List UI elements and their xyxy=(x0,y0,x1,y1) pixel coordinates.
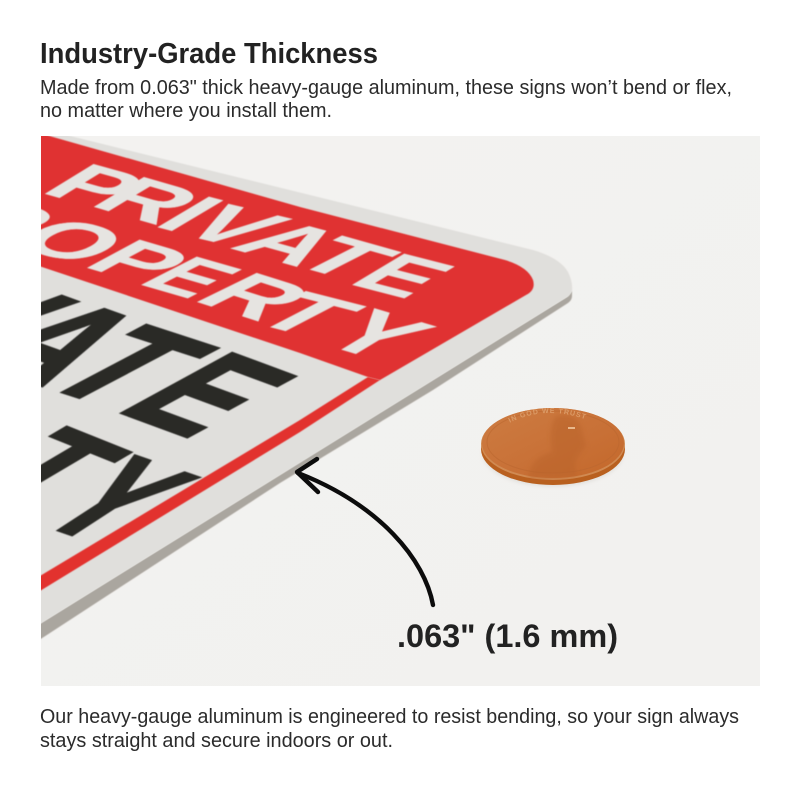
closing text: Our heavy-gauge aluminum is engineered to resist bending, so your sign always xyxy=(40,705,739,728)
penny coin: IN GOD WE TRUST xyxy=(508,408,586,422)
panel: product photo xyxy=(41,136,760,686)
header text: property: T xyxy=(229,282,385,346)
header text: private: V xyxy=(157,195,309,257)
black text: property xyxy=(41,424,202,538)
arrow pointing to sign edge xyxy=(297,459,433,605)
black text: private: T xyxy=(0,306,254,426)
header text: property xyxy=(41,208,438,355)
intro text: no matter where you install them. xyxy=(40,99,332,122)
header text: property: Y xyxy=(299,297,455,372)
header text: private: A xyxy=(211,210,369,276)
thickness label: .063" (1.6 mm) xyxy=(397,618,618,654)
black text: private: E xyxy=(79,331,336,458)
sign edge thickness xyxy=(30,291,572,646)
header text: property: E xyxy=(119,247,263,308)
sign red header xyxy=(30,130,534,380)
header text: private: I xyxy=(136,185,245,242)
closing text: stays straight and secure indoors or out. xyxy=(40,729,393,752)
penny coin xyxy=(481,408,625,485)
intro text: Made from 0.063" thick heavy-gauge aluminum, these signs won’t bend or flex, xyxy=(40,76,732,99)
header text: private: R xyxy=(72,166,223,234)
header text: property: R xyxy=(173,262,337,331)
black text: private xyxy=(41,294,299,440)
sign silver surface xyxy=(30,120,572,630)
header text: private: P xyxy=(24,154,166,219)
black text: property: Y xyxy=(0,434,233,565)
closing text xyxy=(40,705,739,752)
red border stripe xyxy=(30,377,380,597)
intro text xyxy=(40,76,732,122)
header text: property: P xyxy=(65,229,213,293)
title: Industry-Grade Thickness xyxy=(40,38,378,70)
header text: private: T xyxy=(270,227,418,289)
header text: private: E xyxy=(330,243,475,309)
header text: private xyxy=(44,163,455,299)
coin shadow xyxy=(483,458,622,487)
